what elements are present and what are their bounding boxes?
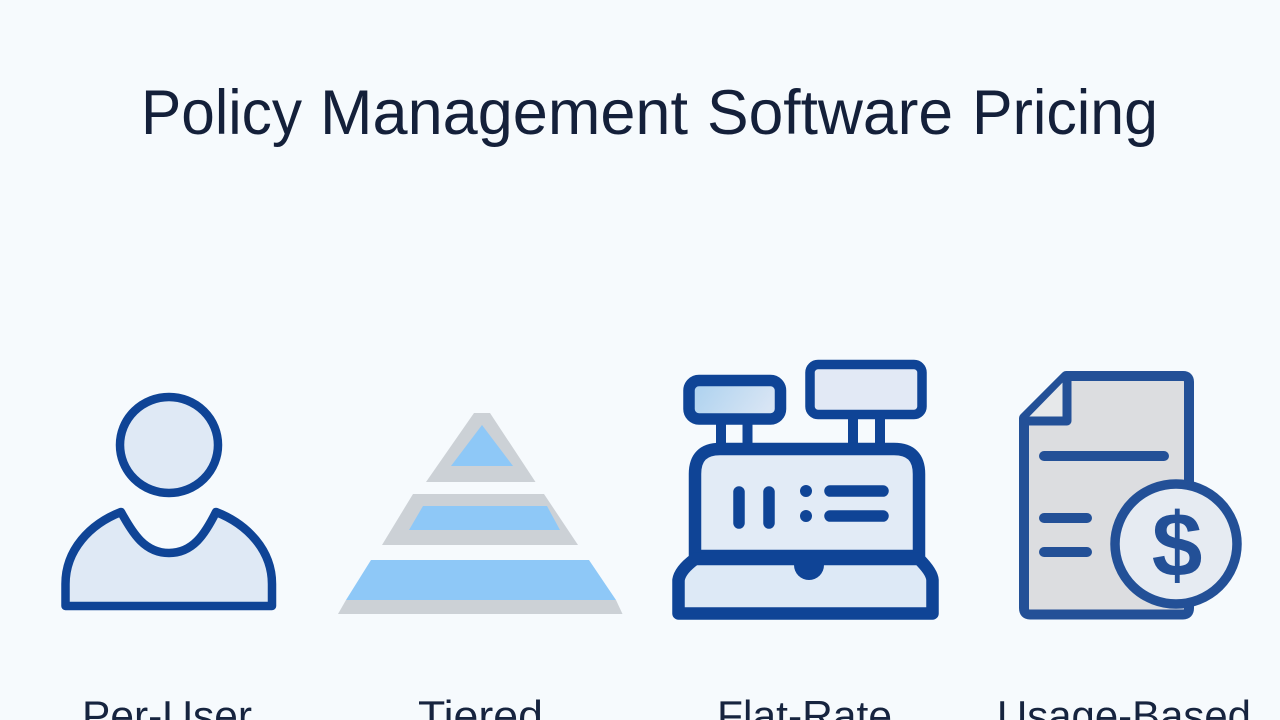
icon: per-user person: [66, 397, 272, 606]
drawer base: [678, 559, 932, 614]
left display: [689, 380, 780, 419]
text lines: [1044, 456, 1164, 552]
folded corner: [1025, 378, 1067, 421]
title: Management: [320, 78, 688, 148]
display stems: [721, 419, 880, 446]
title: Software: [707, 78, 953, 148]
right display: [810, 364, 922, 414]
document sheet: [1024, 376, 1189, 614]
title: [141, 78, 1158, 148]
keypad marks: [739, 491, 883, 523]
icon: cash register: [678, 364, 932, 614]
icon: tiered pyramid: [338, 413, 622, 614]
title: Policy: [141, 78, 302, 148]
register body: [695, 449, 919, 556]
dollar sign: $: [1152, 495, 1202, 596]
drawer notch: [794, 562, 824, 580]
coin: [1115, 484, 1237, 604]
title: Pricing: [972, 78, 1158, 148]
icon: usage-based invoice with dollar coin: [1024, 376, 1237, 614]
